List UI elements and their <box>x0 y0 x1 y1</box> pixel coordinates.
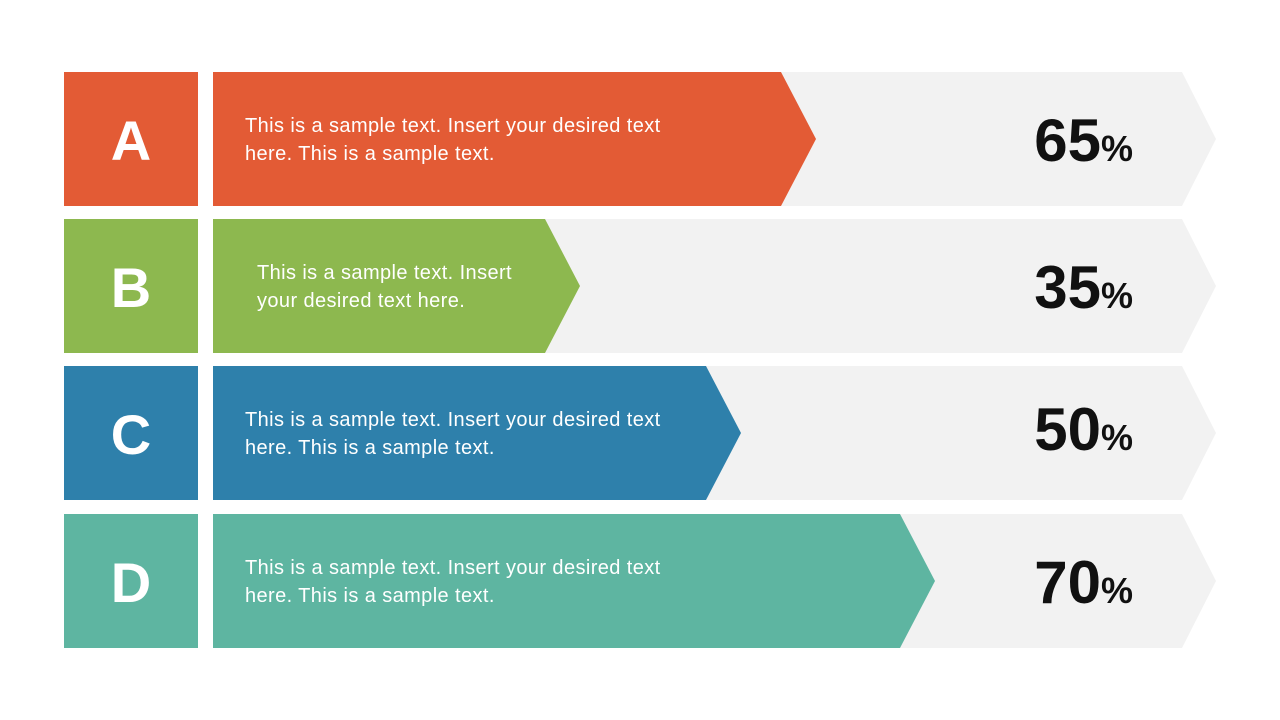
row C <box>64 366 1216 500</box>
percent B: 35% <box>1034 254 1133 321</box>
letter box D <box>64 514 198 648</box>
text A: This is a sample text. Insert your desired text <box>245 115 661 137</box>
row D <box>64 514 1216 648</box>
colored arrow C <box>213 366 741 500</box>
letter box A <box>64 72 198 206</box>
row B <box>64 219 1216 353</box>
letter box D: D <box>111 551 151 614</box>
text D: here. This is a sample text. <box>245 585 495 607</box>
percent A: 65% <box>1034 107 1133 174</box>
text C: here. This is a sample text. <box>245 437 495 459</box>
gray arrow B <box>213 219 1216 353</box>
colored arrow D <box>213 514 935 648</box>
percent C: 50% <box>1034 396 1133 463</box>
letter box A: A <box>111 109 151 172</box>
text D: This is a sample text. Insert your desired text <box>245 557 661 579</box>
letter box B: B <box>111 256 151 319</box>
gray arrow C <box>213 366 1216 500</box>
letter box B <box>64 219 198 353</box>
colored arrow A <box>213 72 816 206</box>
gray arrow A <box>213 72 1216 206</box>
letter box C <box>64 366 198 500</box>
text B: This is a sample text. Insert <box>257 262 512 284</box>
text B: your desired text here. <box>257 290 465 312</box>
percent D: 70% <box>1034 549 1133 616</box>
row A <box>64 72 1216 206</box>
text C: This is a sample text. Insert your desired text <box>245 409 661 431</box>
text A: here. This is a sample text. <box>245 143 495 165</box>
gray arrow D <box>213 514 1216 648</box>
letter box C: C <box>111 403 151 466</box>
colored arrow B <box>213 219 580 353</box>
